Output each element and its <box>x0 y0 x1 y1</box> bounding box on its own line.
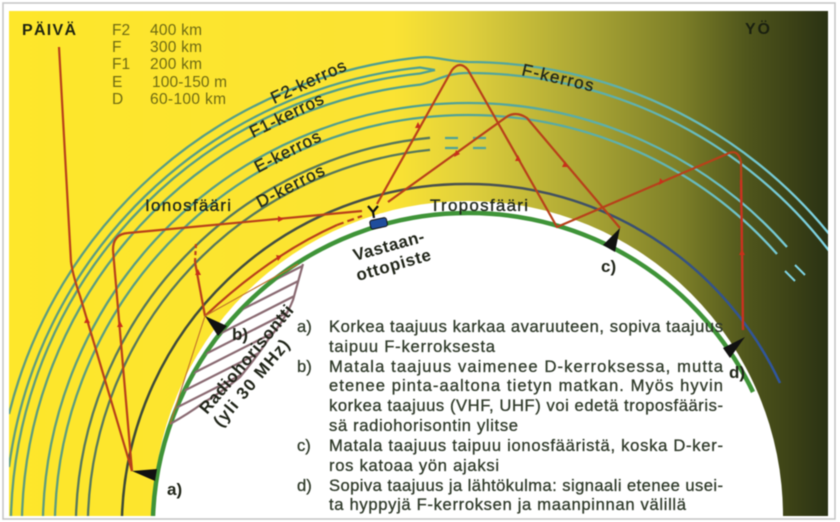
layer label: F2: F2-kerros <box>268 56 349 108</box>
label: radio horizon: Radiohorisontti <box>196 301 297 418</box>
layer label: E: E-kerros <box>251 127 324 177</box>
layer height table: 400 km <box>150 22 202 39</box>
text block: explanations: Matala taajuus taipuu ionosfääristä, koska D-ker- <box>329 436 723 455</box>
icon: antenna b <box>205 316 227 336</box>
ray direction arrows <box>84 122 745 327</box>
text block: explanations <box>297 317 724 514</box>
text block: explanations: Sopiva taajuus ja lähtökulma: signaali etenee usei- <box>329 476 723 495</box>
text block: explanations: etenee pinta-aaltona tietyn matkan. Myös hyvin <box>329 376 723 395</box>
text block: explanations: ros katoaa yön ajaksi <box>329 456 499 475</box>
label: receiving point <box>351 227 433 285</box>
radio horizon hatching <box>170 263 304 426</box>
heading: day: PÄIVÄ <box>22 21 76 39</box>
text block: explanations: d) <box>297 476 312 495</box>
troposphere line <box>122 184 780 516</box>
label: receiving point: ottopiste <box>354 245 433 285</box>
layer height table: F2 <box>112 22 130 39</box>
point label d: d) <box>729 363 745 382</box>
layer height table: 60-100 km <box>150 91 226 108</box>
icon: antenna a <box>132 469 157 481</box>
point label a: a) <box>167 480 182 499</box>
text block: explanations: sä radiohorisontin ylitse <box>329 416 518 435</box>
icon: receiver station <box>368 206 388 230</box>
text block: explanations: a) <box>297 317 312 336</box>
signal rays <box>59 47 743 471</box>
layer height table: 200 km <box>150 56 202 73</box>
layer height table: F1 <box>112 56 130 73</box>
heading: night: YÖ <box>745 19 770 38</box>
layer height table: 100-150 m <box>152 74 227 91</box>
point label b: b) <box>232 325 248 344</box>
layer height table: E <box>112 74 122 91</box>
text block: explanations: korkea taajuus (VHF, UHF) voi edetä troposfääris- <box>329 396 723 415</box>
layer label: D: D-kerros <box>253 161 328 212</box>
label: troposphere: Troposfääri <box>430 196 528 215</box>
earth surface <box>153 201 783 516</box>
icon: antenna d <box>723 337 745 358</box>
text block: explanations: Matala taajuus vaimenee D-kerroksessa, mutta <box>329 357 724 376</box>
layer height table: 300 km <box>150 39 202 56</box>
text block: explanations: Korkea taajuus karkaa avaruuteen, sopiva taajuus <box>329 317 723 336</box>
label: ionosphere: Ionosfääri <box>145 196 231 215</box>
layer label: F: F-kerros <box>520 60 596 95</box>
layer label: F1: F1-kerros <box>246 89 327 142</box>
text block: explanations: ta hyppyjä F-kerroksen ja maanpinnan välillä <box>329 495 687 514</box>
layer height table: F <box>112 39 121 56</box>
text block: explanations: b) <box>297 357 312 376</box>
text block: explanations: c) <box>297 436 311 455</box>
text block: explanations: taipuu F-kerroksesta <box>329 337 496 356</box>
label: radio horizon: (yli 30 MHz) <box>210 336 293 431</box>
icon: antenna c <box>603 228 620 252</box>
layer height table <box>112 22 227 108</box>
layer height table: D <box>112 91 123 108</box>
point label c: c) <box>601 257 616 276</box>
label: receiving point: Vastaan- <box>351 227 426 265</box>
